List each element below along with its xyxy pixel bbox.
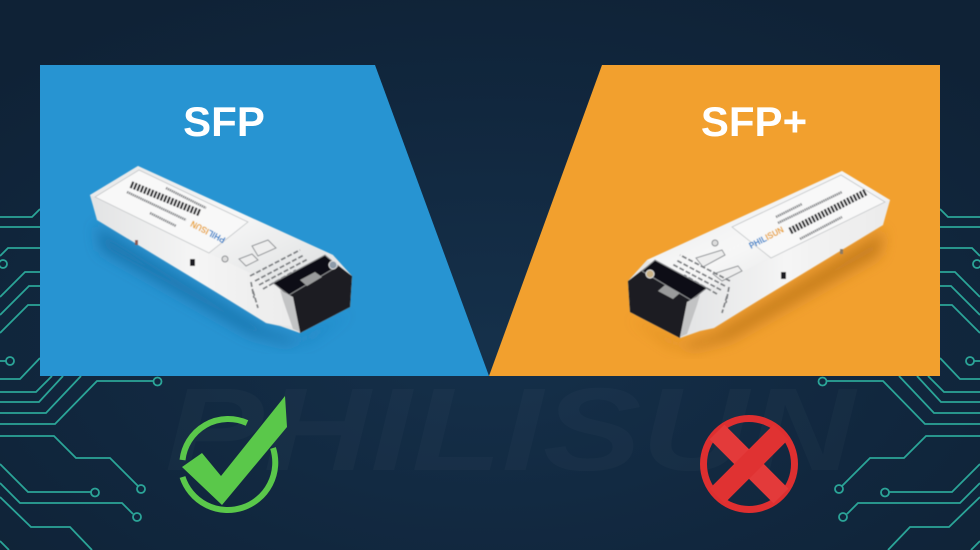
panel: SFP+ orange — [489, 65, 940, 376]
barcode — [790, 192, 866, 231]
heading: SFP+: SFP+ — [701, 98, 807, 145]
black connector — [628, 260, 707, 338]
latches — [252, 240, 276, 256]
barcode — [131, 184, 200, 213]
latches — [696, 250, 725, 267]
side hole — [781, 272, 786, 279]
icon: green check mark — [182, 396, 287, 510]
logo: PHILISUN — [747, 224, 785, 251]
panel: SFP blue — [40, 65, 489, 376]
metal teeth — [250, 250, 308, 308]
icon: red cross — [704, 418, 794, 510]
SFP transceiver module — [90, 166, 352, 345]
black connector — [273, 255, 352, 333]
side hole — [190, 259, 195, 266]
logo: PHILISUN — [189, 219, 227, 245]
SFP+ transceiver module — [628, 171, 890, 350]
watermark: PHILISUN — [165, 364, 858, 496]
circuit traces: left — [0, 209, 162, 550]
circuit traces: right — [818, 209, 980, 550]
heading: SFP: SFP — [183, 98, 265, 145]
metal teeth — [672, 255, 730, 313]
